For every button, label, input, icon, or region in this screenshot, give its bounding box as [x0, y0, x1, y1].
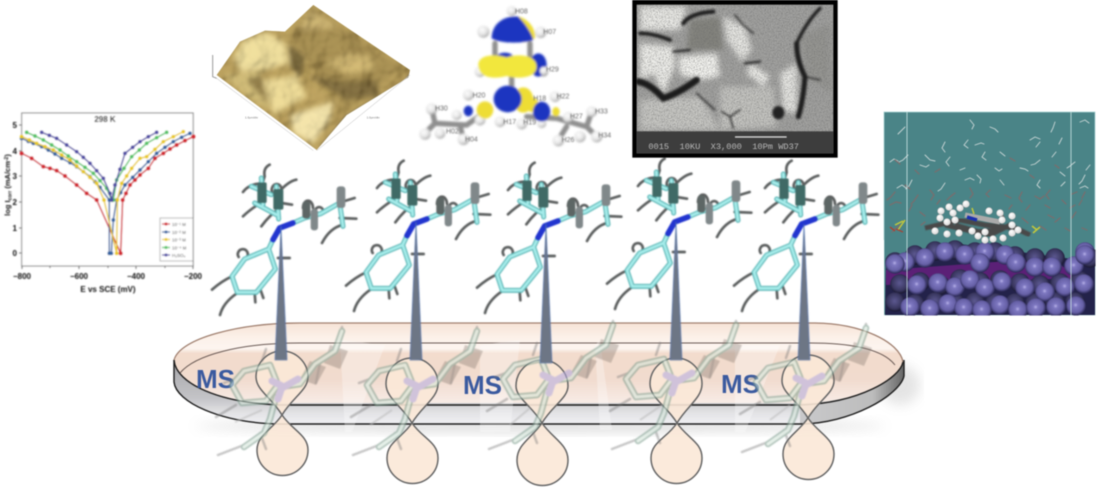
label: MS left: MS	[196, 364, 235, 394]
atom labels: H17	[503, 119, 516, 126]
x axis ticks	[13, 272, 203, 281]
x axis ticks: −400	[127, 272, 146, 281]
x axis title: E vs SCE (mV)	[80, 285, 136, 294]
chart legend: 10⁻² M	[172, 230, 186, 235]
atom labels: H30	[435, 106, 448, 113]
atom labels: H19	[523, 120, 536, 127]
chart title: 298 K	[94, 115, 116, 124]
chart legend: 10⁻⁴ M	[172, 246, 187, 250]
x axis ticks: −600	[70, 272, 89, 281]
molecule 4	[607, 159, 751, 360]
atom labels: H26	[562, 137, 575, 144]
chart legend: 10⁻³ M	[172, 238, 186, 242]
atom labels: H08	[515, 8, 528, 15]
atom labels: H04	[465, 137, 478, 144]
atom labels: H20	[473, 92, 486, 99]
chart legend	[160, 218, 193, 261]
lobes	[518, 17, 535, 43]
y axis ticks: 2	[13, 198, 18, 207]
y axis ticks	[13, 121, 18, 258]
y axis ticks: 1	[13, 224, 18, 233]
image: SEM micrograph: 0015 10KU X3,000 10Pm WD37	[648, 142, 799, 152]
y axis ticks: 3	[13, 172, 18, 181]
atom labels: H02	[446, 128, 459, 135]
x axis ticks: −200	[184, 272, 203, 281]
atom labels	[435, 8, 611, 144]
curve: 10^-4 M	[27, 132, 167, 200]
water molecules	[887, 120, 1090, 232]
periodic cell lines	[907, 112, 1071, 315]
adsorbed inhibitor molecule	[890, 200, 1040, 244]
atom labels: H27	[570, 113, 583, 120]
chart legend: 10⁻¹ M	[172, 222, 186, 227]
x axis ticks: −800	[13, 272, 32, 281]
curve: H2SO4 blank	[42, 132, 157, 200]
bonds	[425, 43, 597, 140]
image: SEM micrograph	[632, 0, 838, 158]
curve: 10^-1 M	[22, 137, 193, 253]
chart: polarization curves at 298 K	[3, 113, 203, 294]
atom labels: H29	[546, 67, 559, 74]
image: molecular dynamics simulation	[878, 112, 1097, 328]
chart legend: H₂SO₄	[172, 253, 185, 258]
faded molecules lying on the surface	[216, 321, 872, 455]
y axis title: )	[3, 154, 12, 157]
molecule 3	[477, 163, 621, 363]
image: AFM surface topography: 1.0μm/div	[367, 116, 380, 120]
atom labels: H18	[533, 96, 546, 103]
atom labels: H07	[543, 29, 556, 36]
label: MS right: MS	[721, 369, 760, 399]
label: MS centre: MS	[463, 370, 502, 400]
orbital lobes: p-orbital figure eights	[256, 351, 834, 486]
image: AFM surface topography: 1.0μm/div	[245, 116, 259, 120]
molecule 2	[346, 161, 490, 360]
panel: petri dish substrate	[174, 323, 920, 432]
atom labels: H33	[595, 109, 608, 116]
y axis ticks: 4	[13, 147, 18, 156]
curve: 10^-3 M	[22, 132, 183, 253]
atom labels: H34	[598, 132, 611, 139]
inhibitor molecules with anchoring stems	[212, 159, 878, 363]
molecule 5	[734, 161, 878, 360]
y axis title: corr	[8, 191, 14, 200]
image: AFM surface topography	[210, 0, 417, 157]
curve: 10^-2 M	[22, 133, 190, 253]
atom labels: H22	[557, 94, 570, 101]
y axis title: log I	[3, 200, 12, 216]
diagram: frontier molecular orbital	[419, 6, 602, 146]
y axis title: (mA/cm	[3, 161, 12, 191]
y axis title: -2	[4, 156, 10, 161]
y axis ticks: 0	[13, 249, 18, 258]
iron slab atoms	[878, 240, 1097, 328]
molecule 1	[212, 165, 356, 360]
atoms	[419, 6, 602, 146]
y axis ticks: 5	[13, 121, 18, 130]
